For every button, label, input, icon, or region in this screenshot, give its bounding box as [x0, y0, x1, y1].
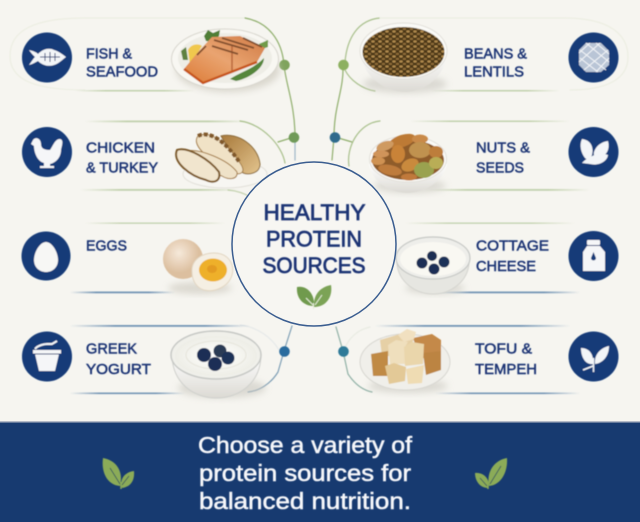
banner message: Choose a variety of [198, 432, 412, 458]
image: sliced chicken on plate [176, 134, 267, 188]
panel: nuts and seeds [369, 127, 618, 193]
label: greek yogurt: YOGURT [86, 361, 151, 378]
title: PROTEIN [266, 226, 362, 252]
image: grilled salmon on plate [172, 29, 280, 92]
icon: jar [568, 231, 618, 281]
label: greek yogurt: GREEK [86, 340, 137, 358]
connector nodes [279, 60, 349, 357]
panel: tofu and tempeh [360, 329, 618, 393]
icon: sprout leaves [568, 332, 618, 382]
title: SOURCES [262, 253, 366, 278]
panel: central title circle [232, 162, 396, 326]
label: beans and lentils: BEANS & [464, 46, 527, 62]
banner message: protein sources for [199, 460, 411, 486]
label: tofu and tempeh: TOFU & [475, 340, 532, 358]
label: fish and seafood: FISH & [86, 46, 132, 62]
icon: leaves [568, 127, 618, 177]
image: yogurt bowl with blueberries [171, 331, 266, 398]
label: cottage cheese: COTTAGE [476, 238, 549, 254]
label: fish and seafood: SEAFOOD [86, 64, 158, 80]
connector lines and card outlines [10, 18, 628, 394]
icon: center green leaves [297, 285, 331, 309]
title: HEALTHY [264, 200, 366, 225]
image: boiled eggs [163, 239, 233, 294]
label: cottage cheese: CHEESE [476, 258, 536, 275]
panel: chicken and turkey [22, 127, 267, 188]
image: cottage cheese bowl [396, 237, 470, 294]
banner message: balanced nutrition. [199, 488, 411, 514]
image: bowl of nuts [369, 131, 447, 193]
icon: right leaves [475, 458, 507, 489]
panel: footer banner [0, 421, 640, 522]
panel: eggs [22, 232, 233, 294]
label: chicken and turkey: & TURKEY [86, 160, 158, 176]
icon: lentils [568, 32, 618, 82]
panel: beans and lentils [360, 23, 618, 93]
panel: cottage cheese [396, 231, 618, 294]
image: bowl of lentils [360, 23, 447, 93]
label: eggs: EGGS [86, 238, 127, 254]
icon: egg [22, 232, 70, 280]
label: nuts and seeds: NUTS & [476, 140, 530, 156]
image: tofu cubes on plate [360, 329, 450, 393]
icon: chicken [22, 127, 72, 177]
label: chicken and turkey: CHICKEN [86, 140, 155, 156]
label: beans and lentils: LENTILS [464, 64, 524, 80]
icon: left leaves [103, 458, 134, 489]
label: nuts and seeds: SEEDS [476, 160, 524, 176]
icon: fish [22, 32, 72, 82]
panel: greek yogurt [22, 331, 266, 398]
label: tofu and tempeh: TEMPEH [475, 361, 537, 378]
panel: fish and seafood [22, 29, 280, 92]
icon: yogurt cup [22, 332, 72, 382]
